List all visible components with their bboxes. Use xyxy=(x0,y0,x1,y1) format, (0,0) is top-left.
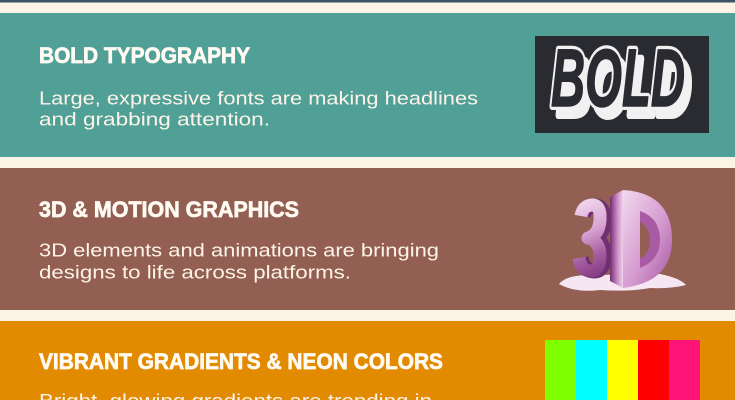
panel: 3d and motion graphics xyxy=(0,168,735,310)
panel: vibrant gradients and neon colors xyxy=(0,321,735,400)
text: 3d and motion description: 3D elements and animations are bringing xyxy=(39,240,439,260)
text: 3d and motion description xyxy=(39,240,439,282)
text: bold typography description: Large, expressive fonts are making headlines xyxy=(39,88,478,108)
panel: bold typography xyxy=(0,13,735,157)
icon: neon color stripes xyxy=(545,340,700,400)
text: bold typography description: and grabbing attention. xyxy=(39,110,270,130)
top strip xyxy=(0,0,735,2)
heading: 3d and motion graphics: 3D & MOTION GRAPHICS xyxy=(39,197,299,222)
heading: vibrant gradients and neon colors: VIBRANT GRADIENTS & NEON COLORS xyxy=(39,349,443,374)
text: bold typography description xyxy=(39,88,478,130)
icon: 3d lettering xyxy=(559,190,686,291)
text: 3d and motion description: designs to life across platforms. xyxy=(39,262,351,282)
heading: bold typography: BOLD TYPOGRAPHY xyxy=(39,43,250,68)
